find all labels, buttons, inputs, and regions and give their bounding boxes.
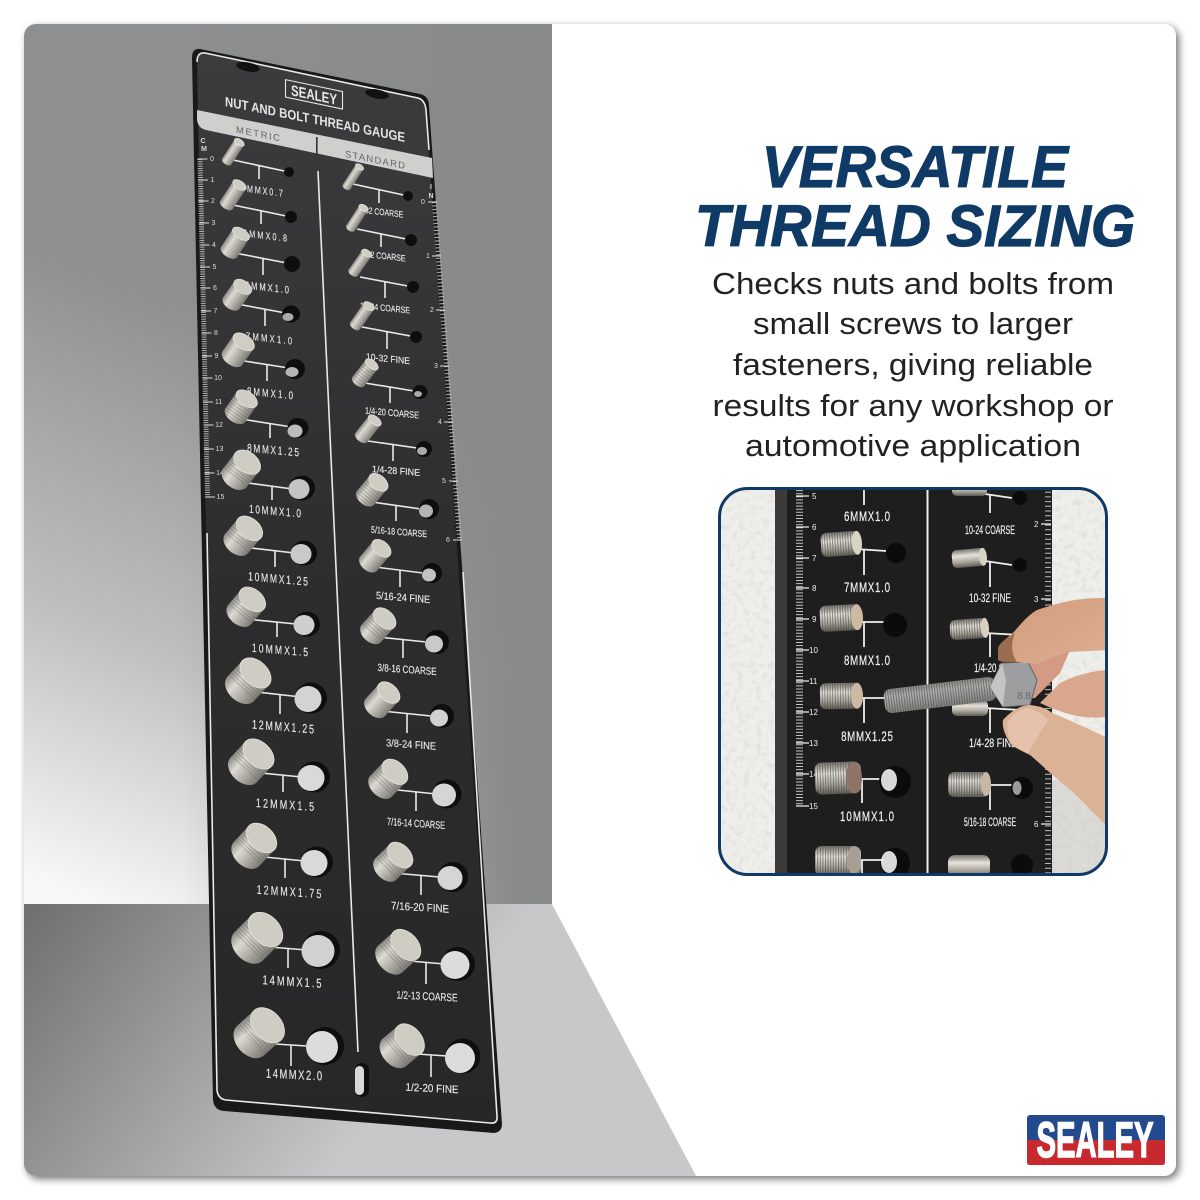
cm ruler: 14: [216, 470, 224, 477]
metric row 14MMX1.5: [224, 905, 340, 991]
bottom slot: [355, 1063, 369, 1097]
inset divider: [926, 487, 928, 875]
inset row 8MMX1.0: [819, 604, 907, 668]
inset row 5/16-18 COARSE: 5/16-18 COARSE: [964, 815, 1016, 829]
cm ruler: 8: [214, 330, 218, 337]
cm ruler: 9: [215, 353, 219, 360]
inset row 1/4-20 COARSE: 1/4-20 COARSE: [974, 661, 1032, 675]
gauge face: [787, 487, 1052, 875]
metric row 10MMX1.0: [217, 445, 315, 521]
metric row 10MMX1.0: 10MMX1.0: [249, 503, 301, 521]
inch ruler: I: [430, 184, 432, 191]
inset row bottom metric: [815, 846, 910, 873]
standard row 1/2-20 FINE: [374, 1018, 480, 1096]
standard row 5/16-24 FINE: [356, 536, 442, 606]
metric heading: METRIC: [236, 125, 280, 144]
inset inch ruler: [1034, 487, 1051, 875]
metric row 7MMX1.0: 7MMX1.0: [246, 330, 292, 347]
cm ruler: C: [200, 138, 206, 145]
heading: THREAD SIZING: [695, 194, 1135, 259]
inset cm ruler: 11: [809, 677, 818, 686]
metric row 6MMX1.0: 6MMX1.0: [245, 279, 289, 296]
description text: Checks nuts and bolts from: [712, 266, 1114, 301]
board face: [197, 53, 497, 1123]
standard row 7/16-20 FINE: [368, 837, 468, 916]
inset row 6MMX1.0: 6MMX1.0: [844, 510, 890, 524]
cm ruler: 15: [217, 494, 224, 501]
inset row 7MMX1.0: 7MMX1.0: [844, 581, 890, 595]
cm ruler: 5: [213, 264, 217, 271]
standard row 8-32 COARSE: [345, 203, 417, 263]
fingertip shadow: [998, 633, 1017, 662]
standard row 10-24 COARSE: [347, 248, 419, 315]
inch ruler: 0: [421, 199, 425, 206]
metric row 8MMX1.0: [218, 329, 305, 403]
inset row 8MMX1.0: 8MMX1.0: [844, 654, 890, 668]
cm ruler: 13: [216, 446, 223, 453]
inset cm ruler: 10: [809, 646, 818, 655]
inset row bottom standard: [948, 854, 1033, 873]
bolt head facet: [990, 663, 1006, 707]
standard row 5/16-18 COARSE: 5/16-18 COARSE: [371, 525, 427, 540]
heading: [695, 135, 1135, 259]
metric row 8MMX1.0: 8MMX1.0: [247, 386, 293, 403]
standard row 1/2-20 FINE: 1/2-20 FINE: [406, 1082, 458, 1096]
inset inch ruler: 3: [1034, 595, 1039, 604]
inch ruler: 4: [438, 419, 442, 426]
header band: [197, 110, 433, 178]
finger pads behind bolt: [1029, 652, 1069, 698]
inset cm ruler: [796, 487, 818, 811]
inset row 6MMX1.0: [844, 490, 890, 522]
board outline: [197, 53, 497, 1123]
mounting slots: [235, 60, 390, 101]
inset inch ruler: 6: [1034, 820, 1039, 829]
test bolt shaft: [883, 676, 997, 714]
standard row 1/4-20 COARSE: [350, 357, 428, 421]
inset cm ruler: 8: [812, 584, 817, 593]
standard row 3/8-24 FINE: [360, 678, 454, 753]
standard row 7/16-20 FINE: 7/16-20 FINE: [391, 900, 449, 916]
inset row 7MMX1.0: [820, 530, 906, 595]
description text: [712, 266, 1114, 463]
cm ruler: 12: [215, 422, 223, 429]
standard row 5/16-24 FINE: 5/16-24 FINE: [376, 590, 430, 606]
metric row 12MMX1.75: 12MMX1.75: [257, 883, 321, 902]
cm ruler: 0: [210, 156, 214, 163]
metric row 8MMX1.25: [221, 386, 308, 460]
lower wall shade: [1052, 780, 1108, 875]
centre divider: [318, 171, 358, 1052]
inch ruler: 2: [430, 307, 434, 314]
metric row 12MMX1.25: [219, 652, 327, 737]
inset row 10-24 COARSE: [952, 490, 1027, 534]
board title: NUT AND BOLT THREAD GAUGE: [225, 94, 405, 145]
inset photo: bolt being checked on the gauge: [718, 481, 1108, 878]
inset row 1/4-20 COARSE: [950, 618, 1012, 672]
standard heading: STANDARD: [345, 149, 405, 172]
metric row 14MMX2.0: [227, 1001, 344, 1084]
metric row 10MMX1.5: [222, 582, 320, 660]
inset row 10-32 FINE: [951, 547, 1027, 605]
inset cm ruler: 6: [812, 523, 817, 532]
middle finger: [1040, 670, 1106, 718]
inset cm ruler: 15: [809, 802, 818, 811]
inset row 8MMX1.25: [820, 683, 893, 744]
inset cm ruler: 14: [809, 770, 818, 779]
metric row 7MMX1.0: [220, 276, 300, 347]
standard row 1/4-20 COARSE: 1/4-20 COARSE: [365, 406, 419, 421]
board logo: SEALEY: [291, 82, 337, 109]
inset row 5/16-18 COARSE: [948, 772, 1033, 829]
description text: automotive application: [745, 428, 1081, 463]
inset row 1/4-28 FINE: [952, 702, 1017, 748]
metric row 10MMX1.25: [219, 511, 317, 589]
metric row 10MMX1.5: 10MMX1.5: [252, 643, 308, 660]
inset row 8MMX1.25: 8MMX1.25: [841, 730, 893, 744]
right wall texture: [1052, 490, 1105, 814]
wall texture: [720, 487, 776, 875]
standard row 1/4-28 FINE: [353, 413, 432, 479]
standard row 1/2-13 COARSE: 1/2-13 COARSE: [396, 989, 458, 1005]
metric row 14MMX2.0: 14MMX2.0: [266, 1067, 322, 1084]
inset cm ruler: 5: [812, 492, 817, 501]
standard row 1/2-13 COARSE: [369, 924, 475, 1005]
bolt head marking: 8.8: [1017, 691, 1031, 702]
board logo: [286, 80, 342, 110]
heading: VERSATILE: [762, 135, 1070, 200]
cm ruler: 4: [212, 242, 216, 249]
standard row 4-32 COARSE: 4-32 COARSE: [359, 204, 403, 220]
standard row 10-32 FINE: [348, 300, 422, 367]
metric row 5MMX0.8: [218, 177, 297, 244]
inset row 10MMX1.0: [814, 761, 911, 824]
standard row 10-32 FINE: 10-32 FINE: [366, 352, 410, 367]
index finger: [998, 598, 1106, 664]
inset cm ruler: 9: [812, 615, 817, 624]
metric row 14MMX1.5: 14MMX1.5: [262, 974, 322, 991]
inset row 10MMX1.0: 10MMX1.0: [840, 810, 894, 824]
cm ruler: M: [201, 146, 207, 153]
standard row 3/8-16 COARSE: 3/8-16 COARSE: [378, 662, 436, 678]
inset inch ruler: 2: [1034, 520, 1039, 529]
description text: small screws to larger: [753, 306, 1073, 341]
metric row 6MMX1.0: [218, 224, 300, 296]
inset border: [720, 488, 1106, 874]
board body: [192, 49, 502, 1133]
band divider: [316, 137, 318, 155]
standard row 1/4-28 FINE: 1/4-28 FINE: [372, 464, 420, 479]
standard row 5/16-18 COARSE: [353, 470, 439, 540]
standard row 7/16-14 COARSE: [363, 754, 462, 832]
standard row 3/8-16 COARSE: [356, 604, 449, 678]
standard row 4-32 COARSE: [341, 162, 413, 220]
inset cm ruler: 7: [812, 554, 817, 563]
standard row 10-24 COARSE: 10-24 COARSE: [360, 301, 410, 315]
inch ruler: 3: [434, 363, 438, 370]
cm ruler: 3: [212, 220, 216, 227]
standard row 7/16-14 COARSE: 7/16-14 COARSE: [387, 816, 445, 832]
metric row 10MMX1.25: 10MMX1.25: [248, 571, 308, 589]
inset row 10-32 FINE: 10-32 FINE: [969, 591, 1011, 605]
description text: fasteners, giving reliable: [733, 347, 1093, 382]
metric row 8MMX1.25: 8MMX1.25: [247, 442, 299, 460]
plaster wall: [718, 487, 1108, 875]
metric row 12MMX1.5: 12MMX1.5: [256, 797, 314, 814]
metric row 4MMX0.7: [220, 137, 294, 199]
thumb: [1003, 705, 1106, 825]
standard row 3/8-24 FINE: 3/8-24 FINE: [386, 737, 436, 753]
metric row 4MMX0.7: 4MMX0.7: [241, 182, 283, 199]
cm ruler: 11: [215, 399, 222, 406]
cm ruler: 7: [214, 308, 218, 315]
cm ruler: [198, 138, 224, 501]
inch ruler: 6: [446, 537, 450, 544]
cm ruler: 6: [213, 285, 217, 292]
inch ruler: N: [428, 193, 434, 200]
inset cm ruler: 13: [809, 739, 818, 748]
inset row 10-24 COARSE: 10-24 COARSE: [965, 523, 1015, 537]
cm ruler: 1: [211, 177, 215, 184]
cm ruler: 10: [214, 375, 222, 382]
thumbnail: [1007, 708, 1048, 753]
inset row 1/4-28 FINE: 1/4-28 FINE: [969, 736, 1017, 750]
metric row 12MMX1.75: [226, 817, 333, 902]
test bolt head: [990, 662, 1037, 707]
inset cm ruler: 12: [809, 708, 818, 717]
standard row 8-32 COARSE: 8-32 COARSE: [360, 249, 406, 263]
cm ruler: 2: [211, 198, 215, 205]
metric row 12MMX1.25: 12MMX1.25: [252, 718, 314, 737]
metric row 12MMX1.5: [222, 733, 330, 814]
metric row 5MMX0.8: 5MMX0.8: [243, 227, 287, 244]
inch ruler: [421, 184, 462, 544]
inch ruler: 1: [426, 253, 430, 260]
inch ruler: 5: [442, 478, 446, 485]
thread gauge board: [192, 49, 502, 1133]
panel: studio backdrop: [24, 24, 696, 1176]
description text: results for any workshop or: [712, 388, 1114, 423]
gauge side edge: [775, 487, 788, 875]
